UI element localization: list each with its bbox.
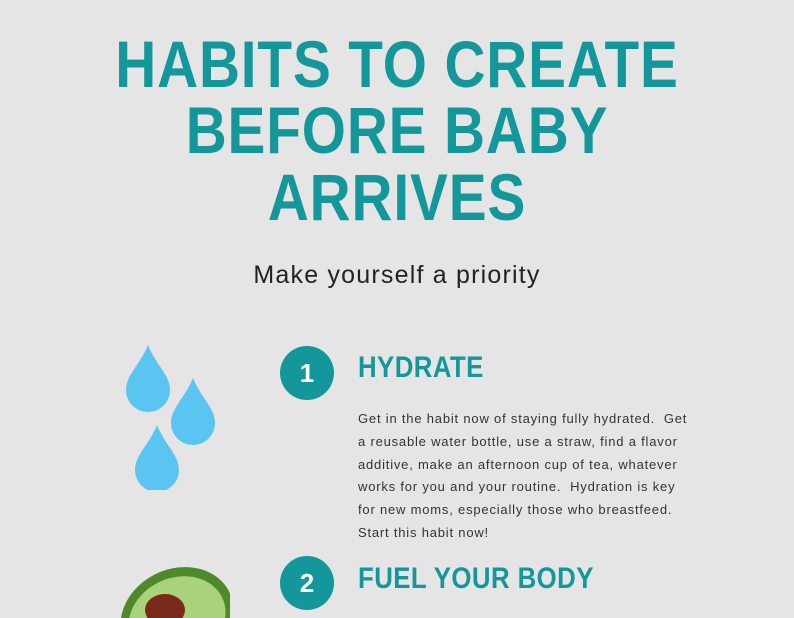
title (115, 27, 679, 234)
title: ARRIVES (268, 160, 526, 234)
step 1 text: a reusable water bottle, use a straw, find a flavor (358, 434, 678, 449)
step 1 number (280, 346, 334, 400)
step 1 text (358, 411, 687, 540)
step 1 text: for new moms, especially those who breastfeed. (358, 502, 672, 517)
title: BEFORE BABY (186, 93, 608, 167)
subtitle: Make yourself a priority (253, 261, 541, 289)
step 1 text: Get in the habit now of staying fully hydrated. Get (358, 411, 687, 426)
step 1 text: additive, make an afternoon cup of tea, whatever (358, 457, 678, 472)
title: HABITS TO CREATE (115, 27, 679, 101)
step 2 number (280, 556, 334, 610)
step 1 text: works for you and your routine. Hydration is key (358, 479, 675, 494)
step 2 number: 2 (300, 568, 314, 598)
icon: avocado (121, 567, 230, 618)
step 1 heading: HYDRATE (358, 351, 484, 384)
step 1 number: 1 (300, 358, 314, 388)
icon: water drops (126, 345, 215, 490)
step 1 text: Start this habit now! (358, 525, 489, 540)
step 2 heading: FUEL YOUR BODY (358, 562, 594, 595)
